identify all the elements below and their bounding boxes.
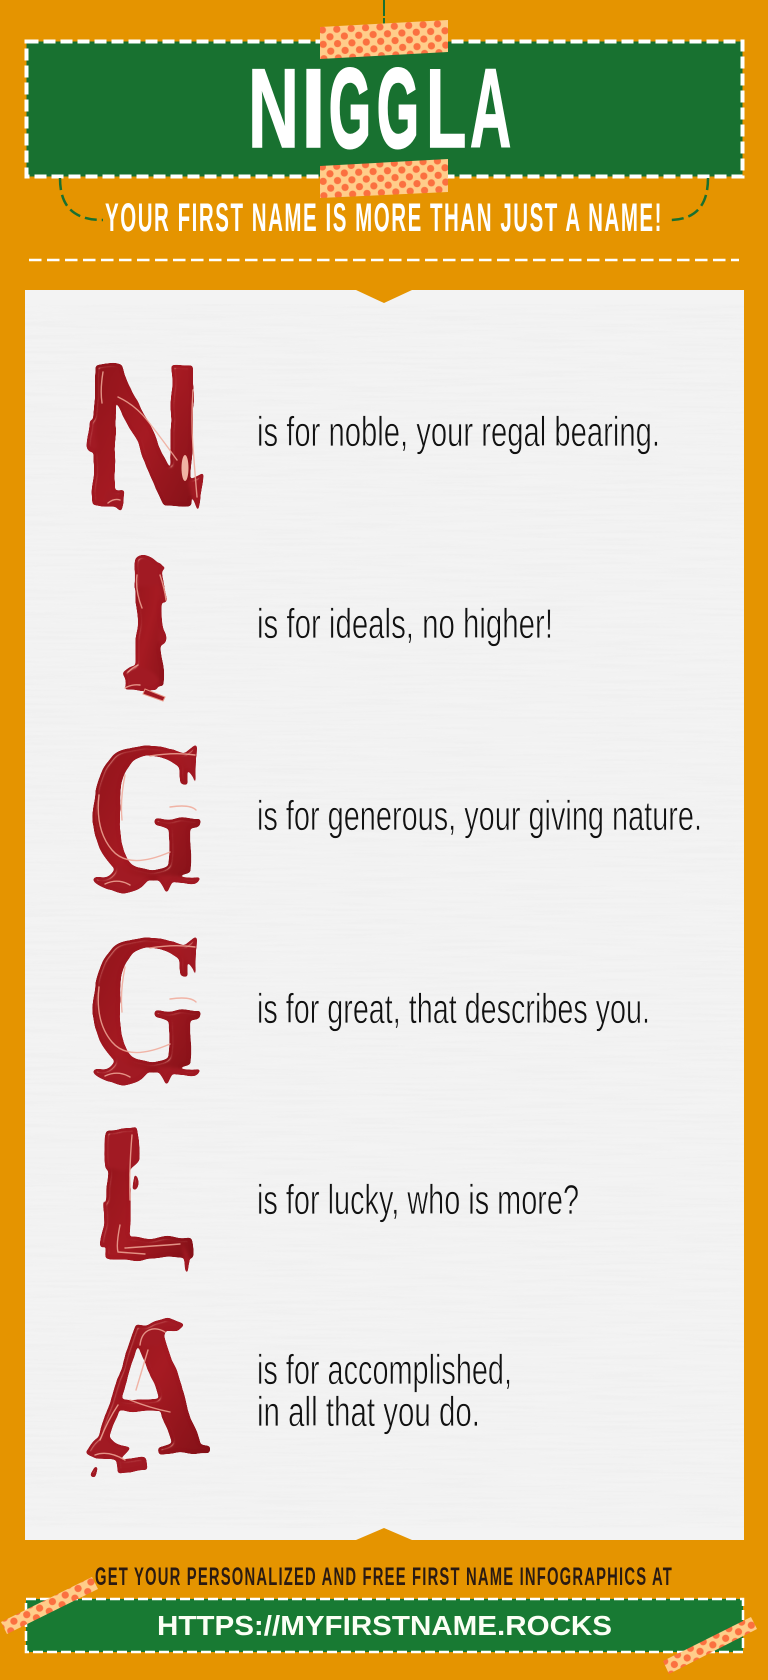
- row 5 text: is for lucky, who is more?: [257, 1176, 579, 1223]
- row 6 second line: in all that you do.: [257, 1388, 480, 1435]
- paper texture: [25, 304, 744, 1528]
- left dashed bracket: [60, 178, 103, 220]
- row 4: letter G: [86, 893, 650, 1114]
- title text: I: [301, 46, 326, 171]
- title banner: [26, 42, 742, 176]
- footer left tape: [1, 1577, 98, 1634]
- main paper panel: [25, 290, 744, 1540]
- blood letter L: L: [96, 1092, 196, 1298]
- hanging green thread: [383, 0, 385, 24]
- white dashed divider: [29, 259, 739, 261]
- blood letter G: G: [86, 893, 205, 1114]
- blood letter A: A: [86, 1280, 210, 1496]
- footer url banner: [26, 1599, 743, 1652]
- right dashed bracket: [669, 178, 708, 220]
- title text: G: [376, 46, 418, 171]
- blood letter I: I: [124, 524, 174, 725]
- blood letter G: G: [86, 701, 205, 922]
- bottom tape: [320, 159, 448, 198]
- row 5: letter L: [96, 1092, 579, 1298]
- row 3: letter G: [86, 701, 702, 922]
- url text: HTTPS://MYFIRSTNAME.ROCKS: [157, 1610, 612, 1641]
- title text: N: [248, 46, 299, 171]
- title text: [0, 0, 768, 200]
- row 6: letter A: [84, 1280, 512, 1496]
- row 2 text: is for ideals, no higher!: [257, 600, 553, 647]
- footer right tape: [663, 1617, 757, 1674]
- row 6 text: is for accomplished,: [257, 1346, 512, 1393]
- row 2: letter I: [122, 524, 553, 725]
- top tape: [320, 20, 448, 59]
- row 1: letter N: [83, 321, 660, 550]
- title text: A: [470, 46, 511, 171]
- blood letter N: N: [83, 321, 203, 550]
- title text: L: [426, 46, 466, 171]
- title text: G: [328, 46, 370, 171]
